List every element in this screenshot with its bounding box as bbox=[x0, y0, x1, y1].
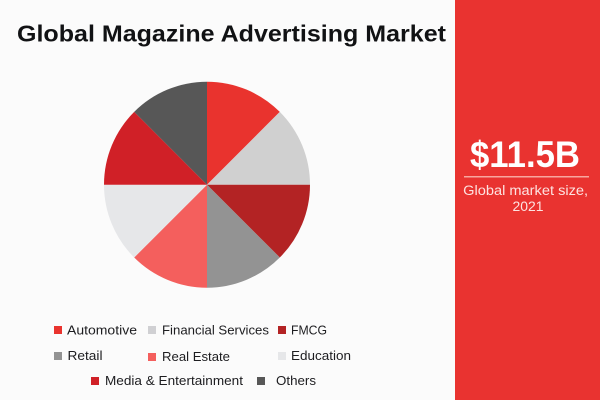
slice: Financial Services bbox=[207, 112, 310, 185]
legend item: Automotive: Automotive bbox=[67, 322, 137, 338]
slice: Real Estate bbox=[134, 185, 207, 288]
slice: Others bbox=[134, 82, 207, 185]
legend item: Retail: Retail bbox=[68, 348, 103, 363]
legend item: Media & Entertainment: Media & Entertainment bbox=[105, 373, 243, 388]
legend item: Financial Services: Financial Services bbox=[162, 322, 269, 338]
market size value: $11.5B bbox=[470, 134, 580, 175]
slice: Media & Entertainment bbox=[104, 112, 207, 185]
legend item: Education: Education bbox=[291, 348, 351, 363]
legend item: Others bbox=[257, 373, 317, 388]
legend item: FMCG: FMCG bbox=[291, 322, 327, 338]
legend item: Others: Others bbox=[276, 373, 317, 388]
slice: Education bbox=[104, 185, 207, 258]
panel: market size bbox=[455, 0, 600, 400]
slice: FMCG bbox=[207, 185, 310, 258]
legend item: Retail bbox=[54, 348, 103, 363]
title: Global Magazine Advertising Market bbox=[17, 20, 446, 46]
market size caption: Global market size, bbox=[463, 183, 588, 198]
market size caption: 2021 bbox=[512, 199, 544, 214]
pie chart bbox=[104, 82, 310, 288]
legend item: Real Estate: Real Estate bbox=[162, 349, 230, 364]
legend bbox=[54, 322, 351, 388]
slice: Automotive bbox=[207, 82, 280, 185]
slice: Retail bbox=[207, 185, 280, 288]
